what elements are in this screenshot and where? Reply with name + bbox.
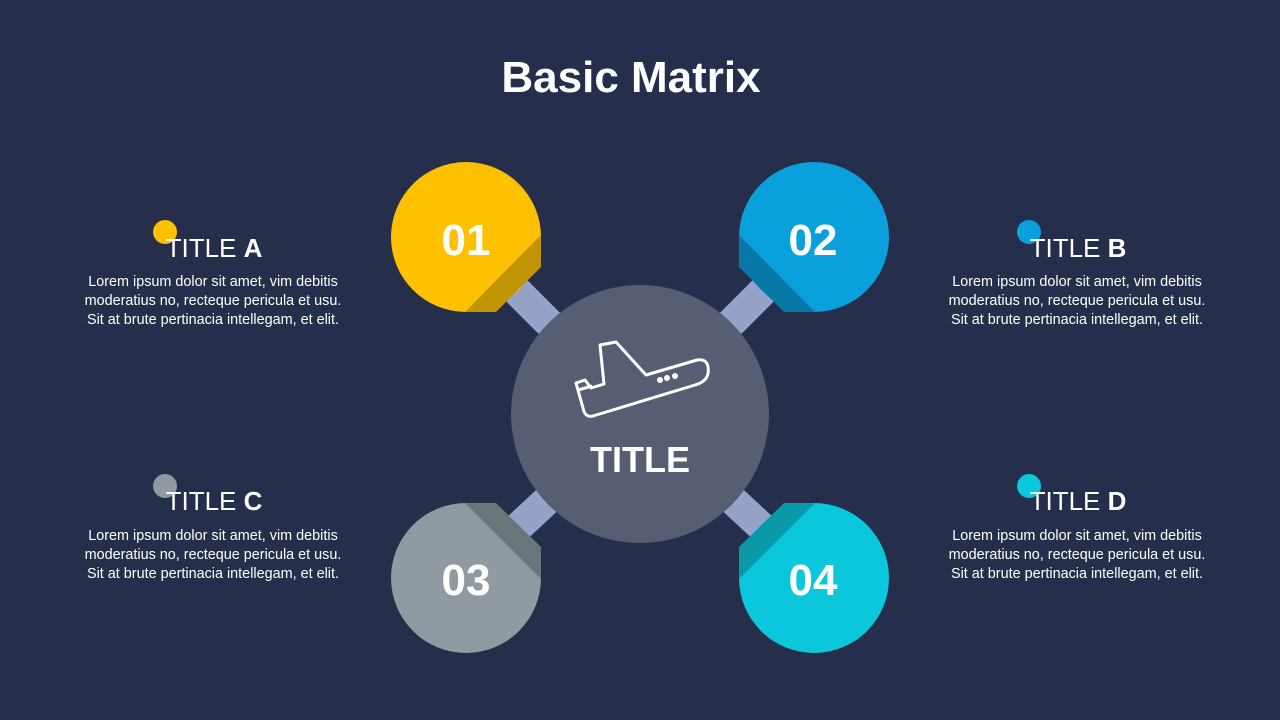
text block D: Lorem ipsum dolor sit amet, vim debitis	[952, 528, 1202, 544]
text block C: moderatius no, recteque pericula et usu.	[85, 547, 341, 563]
text block B: Sit at brute pertinacia intellegam, et elit.	[951, 312, 1203, 328]
node 02	[739, 162, 889, 312]
node 04	[739, 503, 889, 653]
text block B: Lorem ipsum dolor sit amet, vim debitis	[952, 274, 1202, 290]
text block D: Sit at brute pertinacia intellegam, et elit.	[951, 566, 1203, 582]
connectors	[500, 274, 780, 544]
node 01: 01	[442, 216, 490, 265]
node 03: 03	[442, 556, 490, 605]
node 01	[391, 162, 541, 312]
text block B: moderatius no, recteque pericula et usu.	[949, 293, 1205, 309]
title: Basic Matrix	[501, 53, 761, 102]
text block C: TITLE C	[166, 486, 263, 516]
text block A: TITLE A	[166, 233, 263, 263]
text block B: TITLE B	[1030, 233, 1126, 263]
text block C	[85, 474, 341, 582]
text block D: moderatius no, recteque pericula et usu.	[949, 547, 1205, 563]
text block C: Sit at brute pertinacia intellegam, et elit.	[87, 566, 339, 582]
center title: TITLE	[590, 439, 690, 480]
node 03	[391, 503, 541, 653]
center circle	[511, 285, 769, 543]
node 02: 02	[789, 216, 837, 265]
text block A	[85, 220, 341, 328]
text block C: Lorem ipsum dolor sit amet, vim debitis	[88, 528, 338, 544]
text block D	[949, 474, 1205, 582]
text block A: moderatius no, recteque pericula et usu.	[85, 293, 341, 309]
text block A: Sit at brute pertinacia intellegam, et elit.	[87, 312, 339, 328]
text block A: Lorem ipsum dolor sit amet, vim debitis	[88, 274, 338, 290]
text block B	[949, 220, 1205, 328]
node 04: 04	[789, 556, 838, 605]
text block D: TITLE D	[1030, 486, 1126, 516]
icon: airplane	[576, 342, 708, 416]
